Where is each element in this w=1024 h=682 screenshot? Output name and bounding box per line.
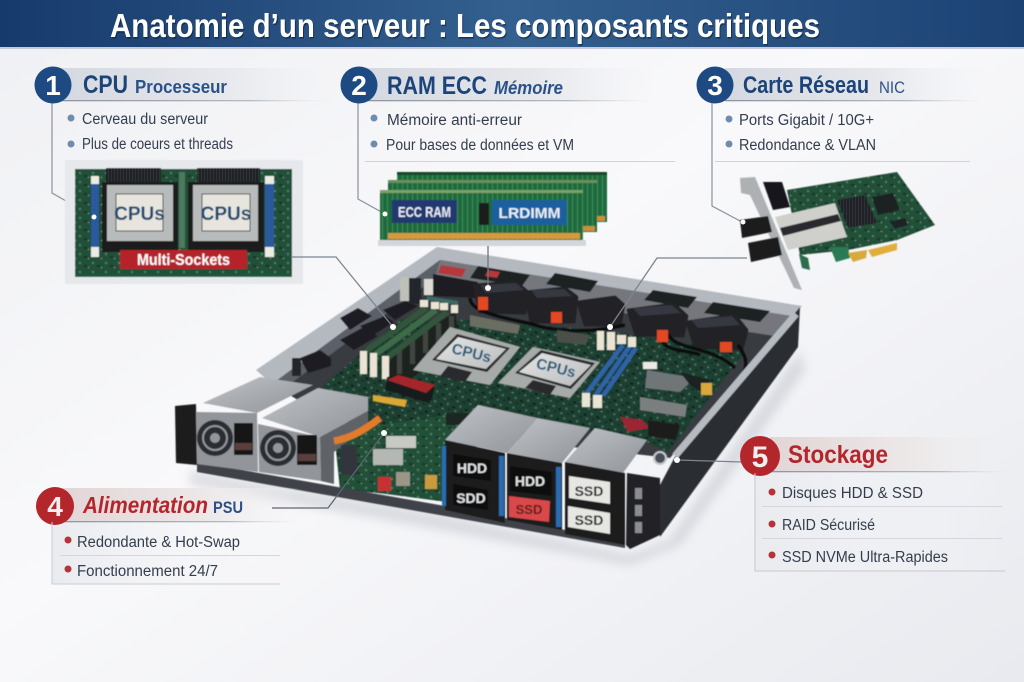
ECC RAM label: ECC RAM bbox=[398, 204, 451, 221]
drive bay fronts bbox=[445, 440, 625, 545]
panel: 5 Stockage bbox=[674, 436, 1010, 571]
heading band bbox=[365, 68, 655, 101]
bullets: SSD NVMe Ultra-Rapides bbox=[782, 549, 948, 566]
power supply two bbox=[258, 388, 368, 484]
bullets: Mémoire anti-erreur bbox=[387, 112, 522, 129]
badge 3: 3 bbox=[707, 70, 723, 101]
heading Carte Réseau: Carte Réseau bbox=[743, 72, 869, 99]
green RAM modules bbox=[360, 296, 458, 385]
leader line bbox=[272, 433, 384, 508]
drive labels: SSD bbox=[575, 483, 603, 499]
subheading PSU: PSU bbox=[213, 498, 243, 517]
RAM modules picture bbox=[378, 172, 607, 246]
motherboard bbox=[316, 320, 745, 500]
drive bay tops bbox=[445, 405, 647, 473]
badge 3 bbox=[696, 66, 734, 104]
heading Alimentation: Alimentation bbox=[82, 492, 208, 518]
bullets: Plus de coeurs et threads bbox=[82, 136, 233, 153]
heading band bbox=[725, 68, 985, 101]
rear I/O components bbox=[341, 413, 470, 491]
server chassis illustration bbox=[175, 247, 802, 549]
fan modules bbox=[474, 282, 747, 349]
bullets: Fonctionnement 24/7 bbox=[77, 563, 218, 580]
LRDIMM label: LRDIMM bbox=[498, 205, 560, 222]
panel: 1 CPU bbox=[34, 66, 330, 284]
leader dot 2 bbox=[382, 212, 388, 216]
drive labels: SSD bbox=[575, 512, 603, 528]
badge 5 bbox=[740, 436, 780, 476]
badge 4 bbox=[36, 487, 74, 525]
ECC RAM label bbox=[392, 200, 457, 223]
server shadow bbox=[190, 350, 805, 565]
CPU socket one: CPUs bbox=[450, 340, 493, 367]
board chips right bbox=[620, 362, 712, 440]
CPU socket two: CPUs bbox=[534, 355, 577, 382]
power supply one bbox=[196, 377, 313, 472]
bullets bbox=[726, 112, 876, 154]
title: Anatomie d’un serveur : Les composants critiques bbox=[110, 7, 820, 44]
drive labels: SSD bbox=[516, 502, 542, 517]
header banner bbox=[0, 0, 1024, 49]
left handle bbox=[175, 404, 197, 465]
front sill bbox=[197, 462, 625, 548]
badge 1 bbox=[34, 66, 72, 104]
VRM heatsink fins bbox=[470, 315, 520, 334]
heading CPU: CPU bbox=[83, 71, 128, 99]
bullets: Redondante & Hot-Swap bbox=[77, 534, 240, 551]
leader line 3 bbox=[712, 103, 742, 222]
CPU board picture: CPUs bbox=[201, 204, 251, 225]
header banner: Anatomie d’un serveur : Les composants critiques bbox=[111, 8, 821, 46]
heading band bbox=[60, 488, 300, 522]
CPU board picture: CPUs bbox=[114, 204, 165, 225]
orange fan connectors bbox=[478, 297, 732, 352]
right front ear bbox=[626, 452, 666, 549]
bullets: Ports Gigabit / 10G+ bbox=[739, 112, 874, 129]
badge 2: 2 bbox=[351, 70, 367, 101]
badge 1: 1 bbox=[45, 70, 61, 101]
drive labels: HDD bbox=[457, 460, 487, 476]
subheading NIC: NIC bbox=[879, 78, 905, 97]
Multi-Sockets label: Multi-Sockets bbox=[137, 252, 230, 269]
heading RAM ECC: RAM ECC bbox=[387, 72, 487, 100]
bullets: Disques HDD & SSD bbox=[782, 485, 923, 502]
leader line 2 bbox=[358, 103, 385, 214]
orange cable bbox=[334, 418, 380, 441]
bullets bbox=[68, 111, 233, 153]
leader dot 3 bbox=[740, 220, 746, 224]
panel: 2 RAM ECC bbox=[340, 66, 675, 246]
bullets bbox=[370, 112, 574, 154]
network card picture bbox=[740, 172, 935, 290]
blue RAM modules bbox=[582, 331, 636, 408]
blue latches bbox=[442, 446, 561, 527]
leader: NIC to server bbox=[607, 258, 747, 330]
bullets: RAID Sécurisé bbox=[782, 517, 875, 534]
CPU socket one bbox=[413, 327, 520, 385]
subheading Mémoire: Mémoire bbox=[494, 78, 563, 98]
right side wall bbox=[660, 307, 800, 537]
heading Stockage: Stockage bbox=[788, 441, 888, 469]
CPU board picture bbox=[65, 160, 303, 284]
subheading Processeur: Processeur bbox=[135, 77, 227, 97]
drive labels: SDD bbox=[456, 490, 486, 506]
memory-side black components bbox=[292, 274, 478, 376]
leader line 5 bbox=[677, 460, 742, 462]
bullets: Pour bases de données et VM bbox=[386, 137, 574, 154]
badge 4: 4 bbox=[47, 491, 63, 522]
badge 2 bbox=[340, 66, 378, 104]
chassis back and left walls bbox=[256, 247, 802, 384]
badge 5: 5 bbox=[752, 441, 768, 474]
panel: 3 Carte Réseau bbox=[696, 66, 985, 290]
heading band bbox=[60, 68, 330, 101]
fan cables bbox=[470, 298, 746, 372]
LRDIMM label bbox=[492, 200, 567, 225]
leader line 1 bbox=[52, 103, 96, 218]
bullets bbox=[60, 534, 280, 580]
drive labels bbox=[453, 454, 610, 534]
CPU socket two bbox=[498, 347, 600, 398]
red heatsink left bbox=[385, 375, 435, 402]
leader: RAM to server bbox=[485, 246, 491, 291]
bullets: Cerveau du serveur bbox=[82, 111, 208, 128]
bullets bbox=[762, 485, 1002, 566]
leader dot 1 bbox=[92, 214, 96, 220]
back ledge bbox=[436, 260, 792, 336]
panel background bbox=[52, 521, 284, 584]
panel background bbox=[755, 472, 1005, 571]
panel: 4 Alimentation bbox=[36, 430, 387, 584]
gold connector bbox=[373, 395, 407, 407]
drive labels: HDD bbox=[515, 473, 545, 489]
leader: CPU board to server bbox=[292, 257, 396, 330]
heading band bbox=[770, 437, 1010, 472]
bullets: Redondance & VLAN bbox=[739, 137, 876, 154]
